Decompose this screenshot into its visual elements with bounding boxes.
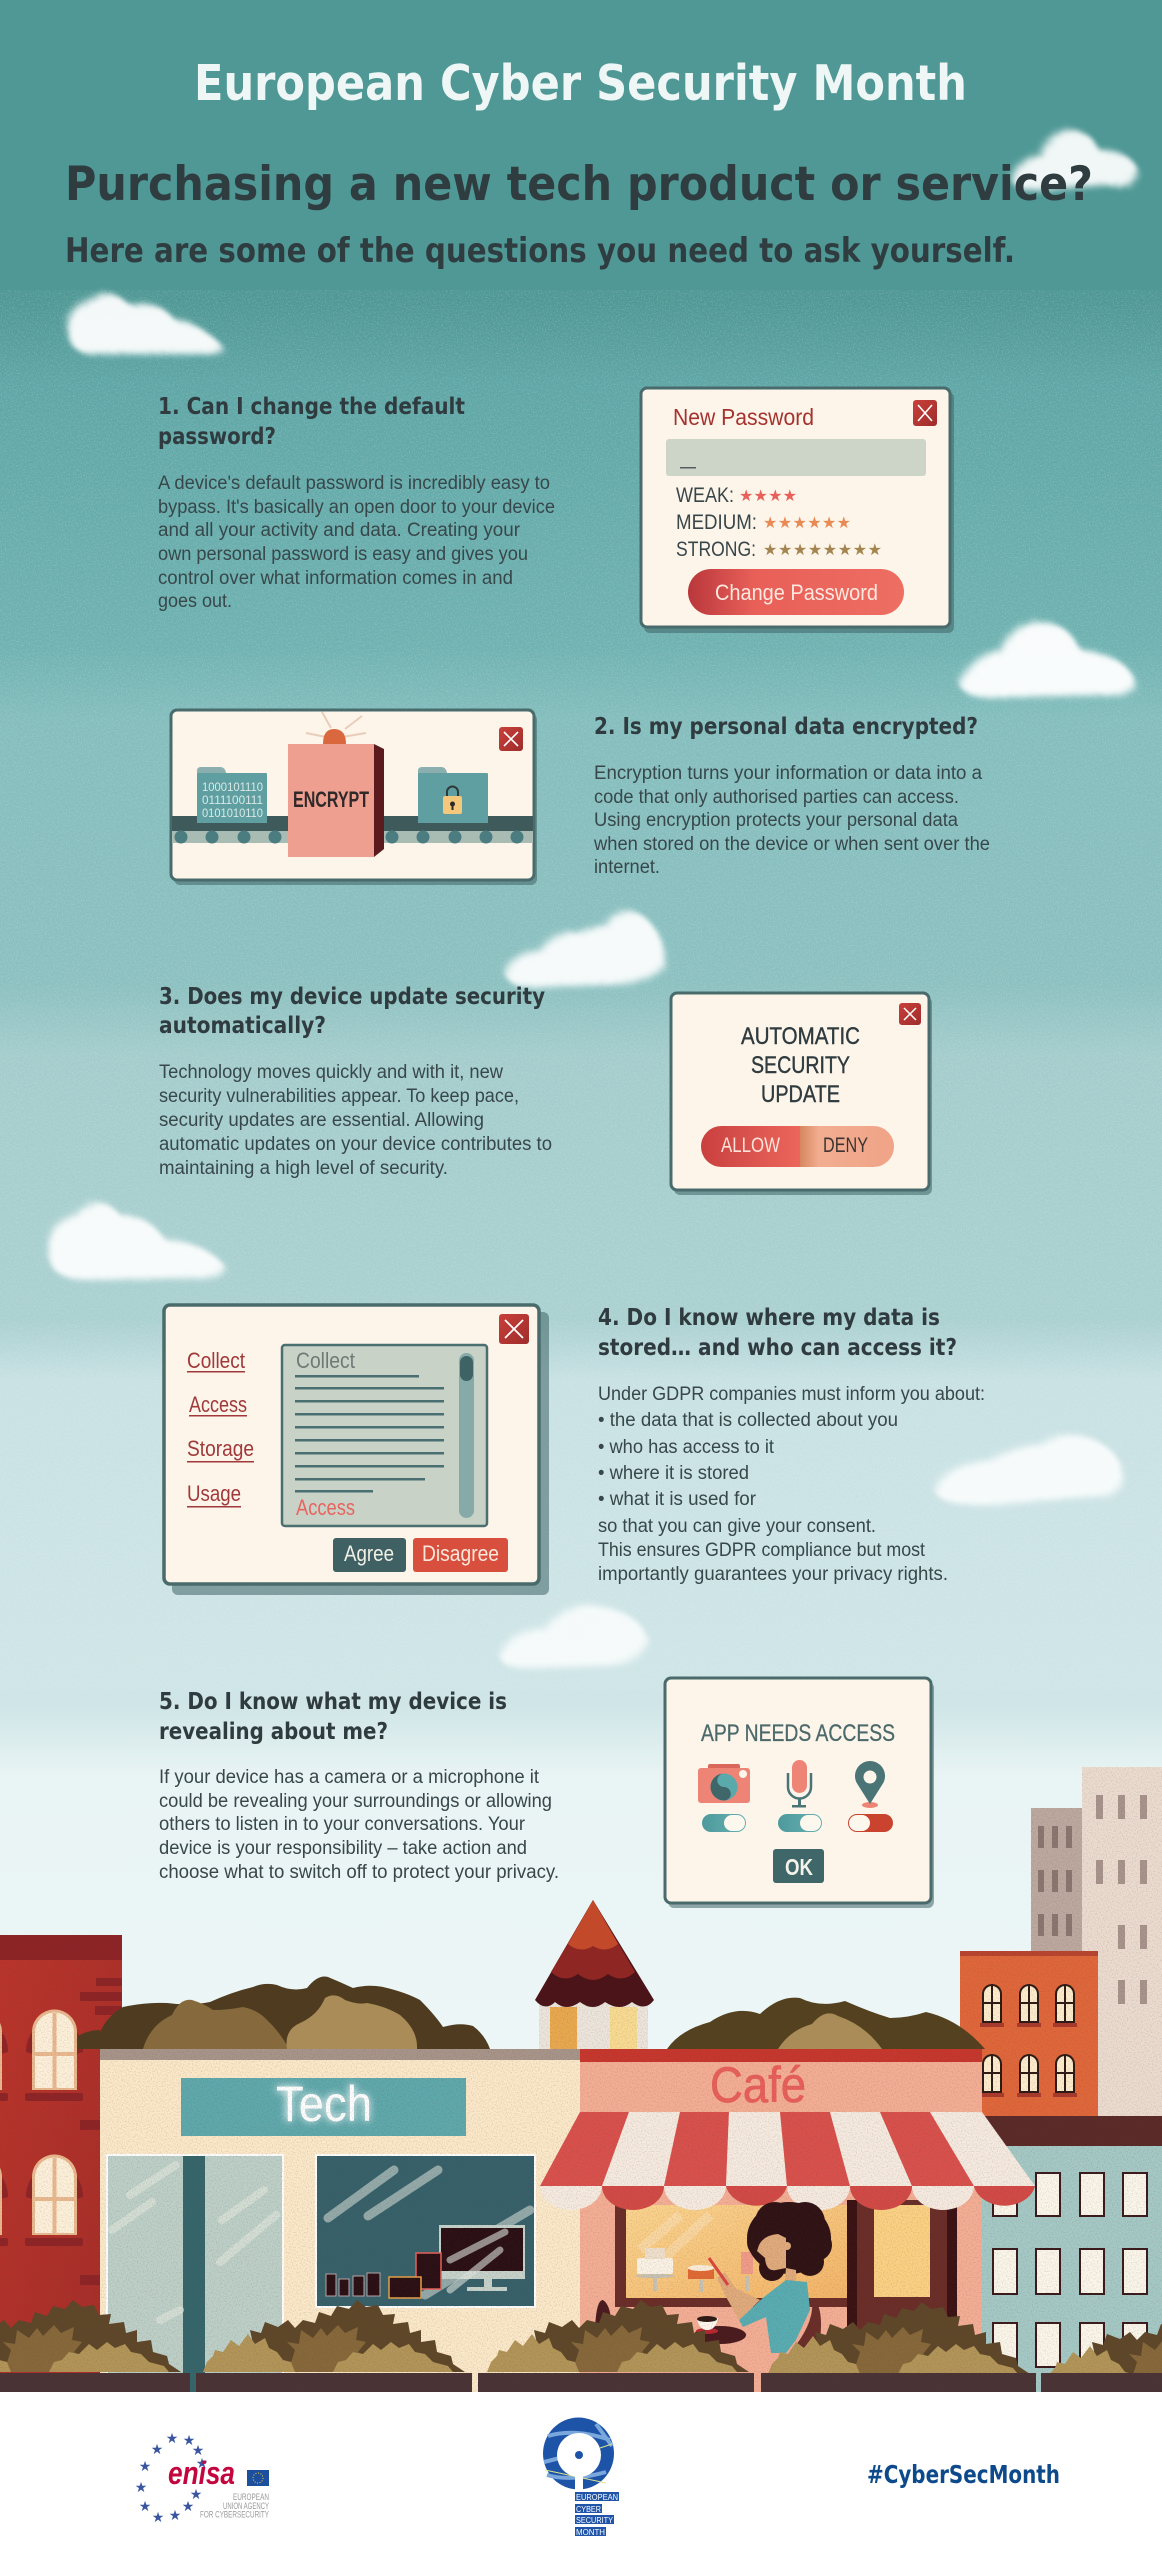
policy links: Access [189,1392,247,1417]
ok button [773,1849,824,1883]
star ring: ★ [169,2508,181,2524]
question 4 text: 4. Do I know where my data is [598,1305,940,1331]
question 3 text: automatic updates on your device contributes to [159,1134,552,1155]
question 3 text: maintaining a high level of security. [159,1158,448,1179]
cloud: right lower [935,1435,1122,1505]
tech sign: Tech [276,2076,372,2132]
password input [666,439,926,476]
question 3 text: security vulnerabilities appear. To keep pace, [159,1086,519,1107]
question 4 text [598,1305,985,1585]
star ring: ★ [190,2487,202,2503]
cloud: right second [959,622,1135,698]
monitor and devices [326,2225,525,2298]
cloud: faint centre [500,1605,648,1668]
strength ratings: WEAK: [676,484,734,507]
dialog text [741,1023,860,1108]
title: European Cyber Security Month [194,55,967,112]
strength ratings [676,484,882,561]
building: teal block [982,2116,1162,2392]
star ring [135,2431,208,2526]
icon: close button [499,727,523,751]
scrolling terms box: Collect [296,1348,355,1373]
icon: close button [499,1314,529,1344]
star ring: ★ [139,2459,151,2475]
icon: close button [913,400,937,426]
icon: encrypt machine [288,712,384,857]
building: orange brick [960,1951,1098,2121]
main heading: Purchasing a new tech product or service? [65,157,1093,212]
icon: encrypt machine: ENCRYPT [293,787,369,812]
disagree button: Disagree [422,1541,499,1566]
dialog text: AUTOMATIC [741,1023,860,1050]
logo: European Cyber Security Month: CYBER [576,2504,601,2514]
footer band [0,2392,1162,2560]
question 4 text: • what it is used for [598,1489,757,1510]
icon: microphone [788,1760,811,1808]
agree button: Agree [344,1541,394,1566]
cafe door [847,2200,957,2392]
panel: automatic update dialog [671,993,932,1195]
question 5 text: choose what to switch off to protect your privacy. [159,1862,559,1883]
star ring: ★ [151,2442,163,2458]
conveyor belt [172,816,533,844]
rooftop bushes right [667,1998,985,2049]
strength ratings: ★★★★ [739,486,797,505]
building: far right tower [1031,1767,1162,2127]
question 1 text: and all your activity and data. Creating your [158,520,521,541]
dialog text: SECURITY [751,1052,850,1079]
policy links [187,1348,254,1508]
star ring: ★ [196,2456,208,2472]
icon: data folder: 1000101110 [202,780,263,794]
panel: app permissions dialog [665,1678,934,1908]
policy links: Usage [187,1481,241,1506]
question 2 text: code that only authorised parties can access. [594,787,959,808]
logo: enisa: enisa [168,2455,235,2491]
star ring: ★ [192,2443,204,2459]
panel: new password dialog [641,388,954,633]
question 2 text: Encryption turns your information or data into a [594,763,982,784]
allow deny toggle [701,1126,894,1167]
dialog text: UPDATE [761,1081,840,1108]
star ring: ★ [182,2499,194,2515]
logo: European Cyber Security Month: EUROPEAN [576,2492,618,2502]
rooftop bushes left [78,1976,490,2049]
cloud: top right [1012,130,1138,190]
cloud: middle [505,911,665,987]
hashtag: #CyberSecMonth [867,2460,1060,2489]
tower with conical roof [535,1900,654,2049]
shop: tech store [100,2049,580,2392]
scrolling terms box [282,1345,487,1526]
shop door [106,2154,284,2392]
question 5 text: 5. Do I know what my device is [159,1689,507,1715]
question 1 text: control over what information comes in and [158,568,513,589]
cloud: left lower [48,1202,225,1280]
question 2 text: internet. [594,857,660,878]
question 1 text: password? [158,424,276,450]
question 1 text: A device's default password is incredibly easy to [158,473,550,494]
agree button [333,1538,406,1572]
building: red brick left [0,1935,122,2392]
allow deny toggle: ALLOW [721,1134,780,1157]
icon: data folder: 0111100111 [202,793,263,807]
panel: privacy policy dialog [164,1305,549,1595]
logo: enisa: UNION AGENCY [223,2501,269,2511]
change password button [688,569,904,615]
question 3 text: automatically? [159,1013,326,1039]
icon: camera [698,1764,750,1803]
question 5 text: If your device has a camera or a microphone it [159,1767,540,1788]
question 4 text: This ensures GDPR compliance but most [598,1540,926,1561]
woman with phone [709,2202,832,2353]
tech sign: Tech [276,2076,372,2132]
question 3 text: 3. Does my device update security [159,984,545,1010]
icon: data folder: 0101010110 [202,806,263,820]
scrolling terms box: Access [296,1495,355,1520]
city grain texture [0,1767,1162,2392]
strength ratings: STRONG: [676,538,756,561]
sky grain texture [0,290,1162,1690]
policy links: Storage [187,1436,254,1461]
question 5 text [159,1689,559,1883]
chair backs [595,2298,821,2352]
question 4 text: so that you can give your consent. [598,1516,876,1537]
panel: encrypt dialog [171,710,537,885]
panel: app permissions dialog: APP NEEDS ACCESS [701,1720,895,1747]
question 1 text: own personal password is easy and gives you [158,544,528,565]
question 5 text: device is your responsibility – take action and [159,1838,527,1859]
icon: locked folder [418,767,488,823]
question 5 text: others to listen in to your conversations. Your [159,1814,526,1835]
question 3 text [159,984,552,1179]
question 1 text: 1. Can I change the default [158,394,465,420]
cakes [635,2248,753,2292]
cafe table and cup [694,2316,746,2344]
question 2 text: 2. Is my personal data encrypted? [594,714,978,740]
logo: European Cyber Security Month [543,2418,619,2537]
logo: European Cyber Security Month: MONTH [576,2527,605,2537]
icon: EU flag [247,2470,269,2486]
question 4 text: • where it is stored [598,1463,749,1484]
icon: close button [899,1003,921,1025]
strength ratings: MEDIUM: [676,511,757,534]
cafe window [615,2205,847,2307]
policy links: Collect [187,1348,245,1373]
question 4 text: Under GDPR companies must inform you about: [598,1384,985,1405]
question 4 text: stored… and who can access it? [598,1335,957,1361]
question 5 text: revealing about me? [159,1719,388,1745]
disagree button [413,1538,508,1572]
planters [0,2373,1162,2392]
logo: enisa: FOR CYBERSECURITY [200,2510,269,2520]
panel: new password dialog: New Password [673,404,814,430]
strength ratings: ★★★★★★ [763,513,851,532]
star ring: ★ [135,2480,147,2496]
subheading: Here are some of the questions you need to ask yourself. [65,231,1015,271]
cafe sign: Café [710,2057,806,2113]
tech sign [181,2076,466,2136]
microphone toggle on [778,1814,822,1832]
star ring: ★ [166,2431,178,2447]
camera toggle on [702,1814,746,1832]
change password button: Change Password [715,580,878,605]
question 4 text: • who has access to it [598,1437,775,1458]
question 5 text: could be revealing your surroundings or allowing [159,1791,552,1812]
question 1 text: bypass. It's basically an open door to your device [158,497,555,518]
location toggle off [848,1814,893,1832]
question 4 text: importantly guarantees your privacy rights. [598,1564,948,1585]
question 3 text: Technology moves quickly and with it, new [159,1062,503,1083]
ok button: OK [785,1854,813,1880]
question 2 text: Using encryption protects your personal data [594,810,958,831]
foreground bushes [0,2300,1162,2384]
cloud: left upper [68,294,222,354]
question 1 text: goes out. [158,591,232,612]
logo: European Cyber Security Month: SECURITY [576,2515,613,2525]
shop: cafe [540,2049,1035,2392]
logo: enisa: EUROPEAN [233,2492,269,2502]
star ring: ★ [183,2433,195,2449]
strength ratings: ★★★★★★★★ [763,540,882,559]
allow deny toggle: DENY [823,1134,868,1157]
question 2 text: when stored on the device or when sent over the [593,834,990,855]
star ring: ★ [152,2510,164,2526]
icon: data folder [197,767,267,823]
question 1 text [158,394,555,612]
question 3 text: security updates are essential. Allowing [159,1110,484,1131]
cafe awning [540,2112,1035,2210]
question 2 text [593,714,990,878]
logo: enisa [135,2431,269,2526]
icon: location pin [855,1761,885,1808]
question 4 text: • the data that is collected about you [598,1410,898,1431]
shop window [315,2154,536,2308]
star ring: ★ [139,2499,151,2515]
